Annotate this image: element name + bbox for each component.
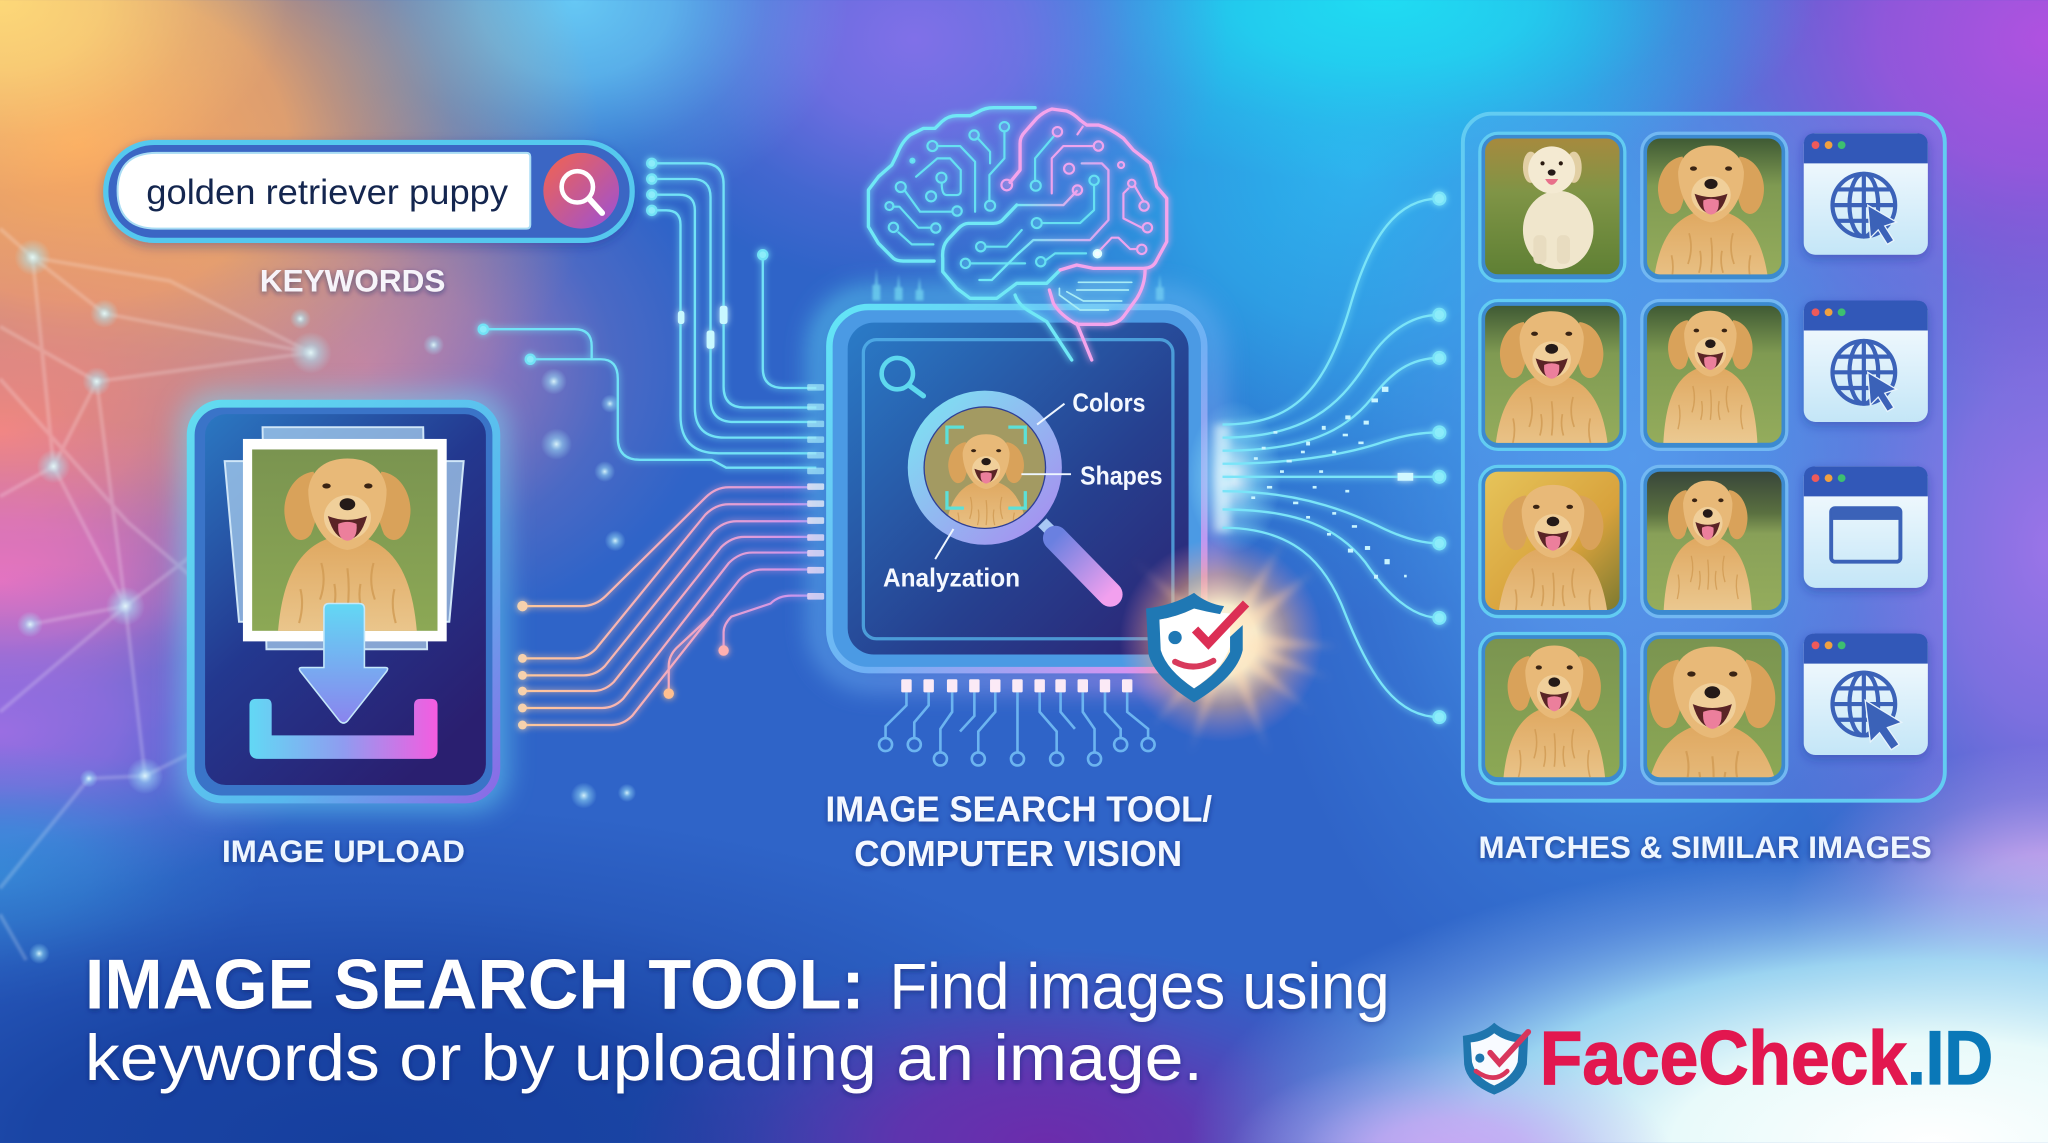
web result card 2 [1804,300,1928,422]
dog tile 5 [1480,466,1625,637]
label: image search tool / computer vision: COMPUTER VISION [854,833,1182,874]
dog tile 4 [1642,300,1787,449]
label: image search tool / computer vision [825,789,1212,874]
label: analyzation: Analyzation [883,563,1020,593]
cerebellum lines [1059,282,1132,310]
icon: logo shield [1463,1023,1528,1095]
icon: upload tray [249,699,438,759]
icon: small magnifier [882,358,923,396]
web result card 1 [1804,133,1928,255]
dog tile: puppy in grass [1480,133,1625,281]
brain right circuit traces [1001,127,1152,257]
panel: image upload [179,392,508,811]
search bar [106,142,632,240]
chip: central processor panel [820,298,1212,679]
label: shapes: Shapes [1080,461,1162,491]
wordmark: FaceCheck [1540,1016,1908,1101]
decorative network of glowing nodes [0,229,636,964]
output data streams [1187,193,1445,723]
brain right half outline [1010,109,1167,360]
search query text: golden retriever puppy [146,173,508,212]
focus corners [947,427,1025,508]
panel: matches and similar images [1463,114,1945,837]
chip pins left [807,384,824,600]
icon: brain with circuits [868,108,1167,360]
dog tile 8 [1640,632,1788,786]
headline [85,944,1390,1094]
chip pins bottom with traces [879,679,1155,765]
starburst behind shield [1119,536,1340,756]
icon: download arrow [299,604,388,723]
label: keywords: KEYWORDS [260,263,445,298]
web result card 3 [1804,466,1928,588]
label: image upload: IMAGE UPLOAD [222,834,465,869]
dog tile 6 [1642,466,1787,618]
icon: FaceCheck shield badge [1146,593,1246,702]
logo: FaceCheck.ID [1463,1016,1993,1101]
dog tile 3 [1480,300,1625,468]
circuit traces: image upload to chip [517,487,816,729]
label: image search tool / computer vision: IMAGE SEARCH TOOL/ [825,789,1212,830]
brain left circuit traces [885,122,1099,268]
label: matches and similar images: MATCHES & SIMILAR IMAGES [1479,830,1932,865]
icon: search button [543,153,619,229]
headline: Find images using [889,949,1390,1022]
dog tile 2 [1640,132,1788,282]
chip top connector spikes [872,268,1164,300]
brain left half outline [868,108,1072,360]
wordmark suffix: .ID [1907,1016,1993,1101]
brain bridge traces [979,163,1108,280]
stacked photo cards [225,427,464,649]
icon: magnifier with dog [914,398,1110,594]
headline: keywords or by uploading an image. [85,1021,1203,1094]
label: colors: Colors [1072,387,1145,417]
dog tile 7 [1480,634,1625,798]
circuit traces: keywords to chip [479,159,816,468]
headline: IMAGE SEARCH TOOL: [85,944,865,1023]
pointer lines [935,404,1071,559]
main dog photo [243,439,447,649]
web result card 4 [1804,634,1928,755]
